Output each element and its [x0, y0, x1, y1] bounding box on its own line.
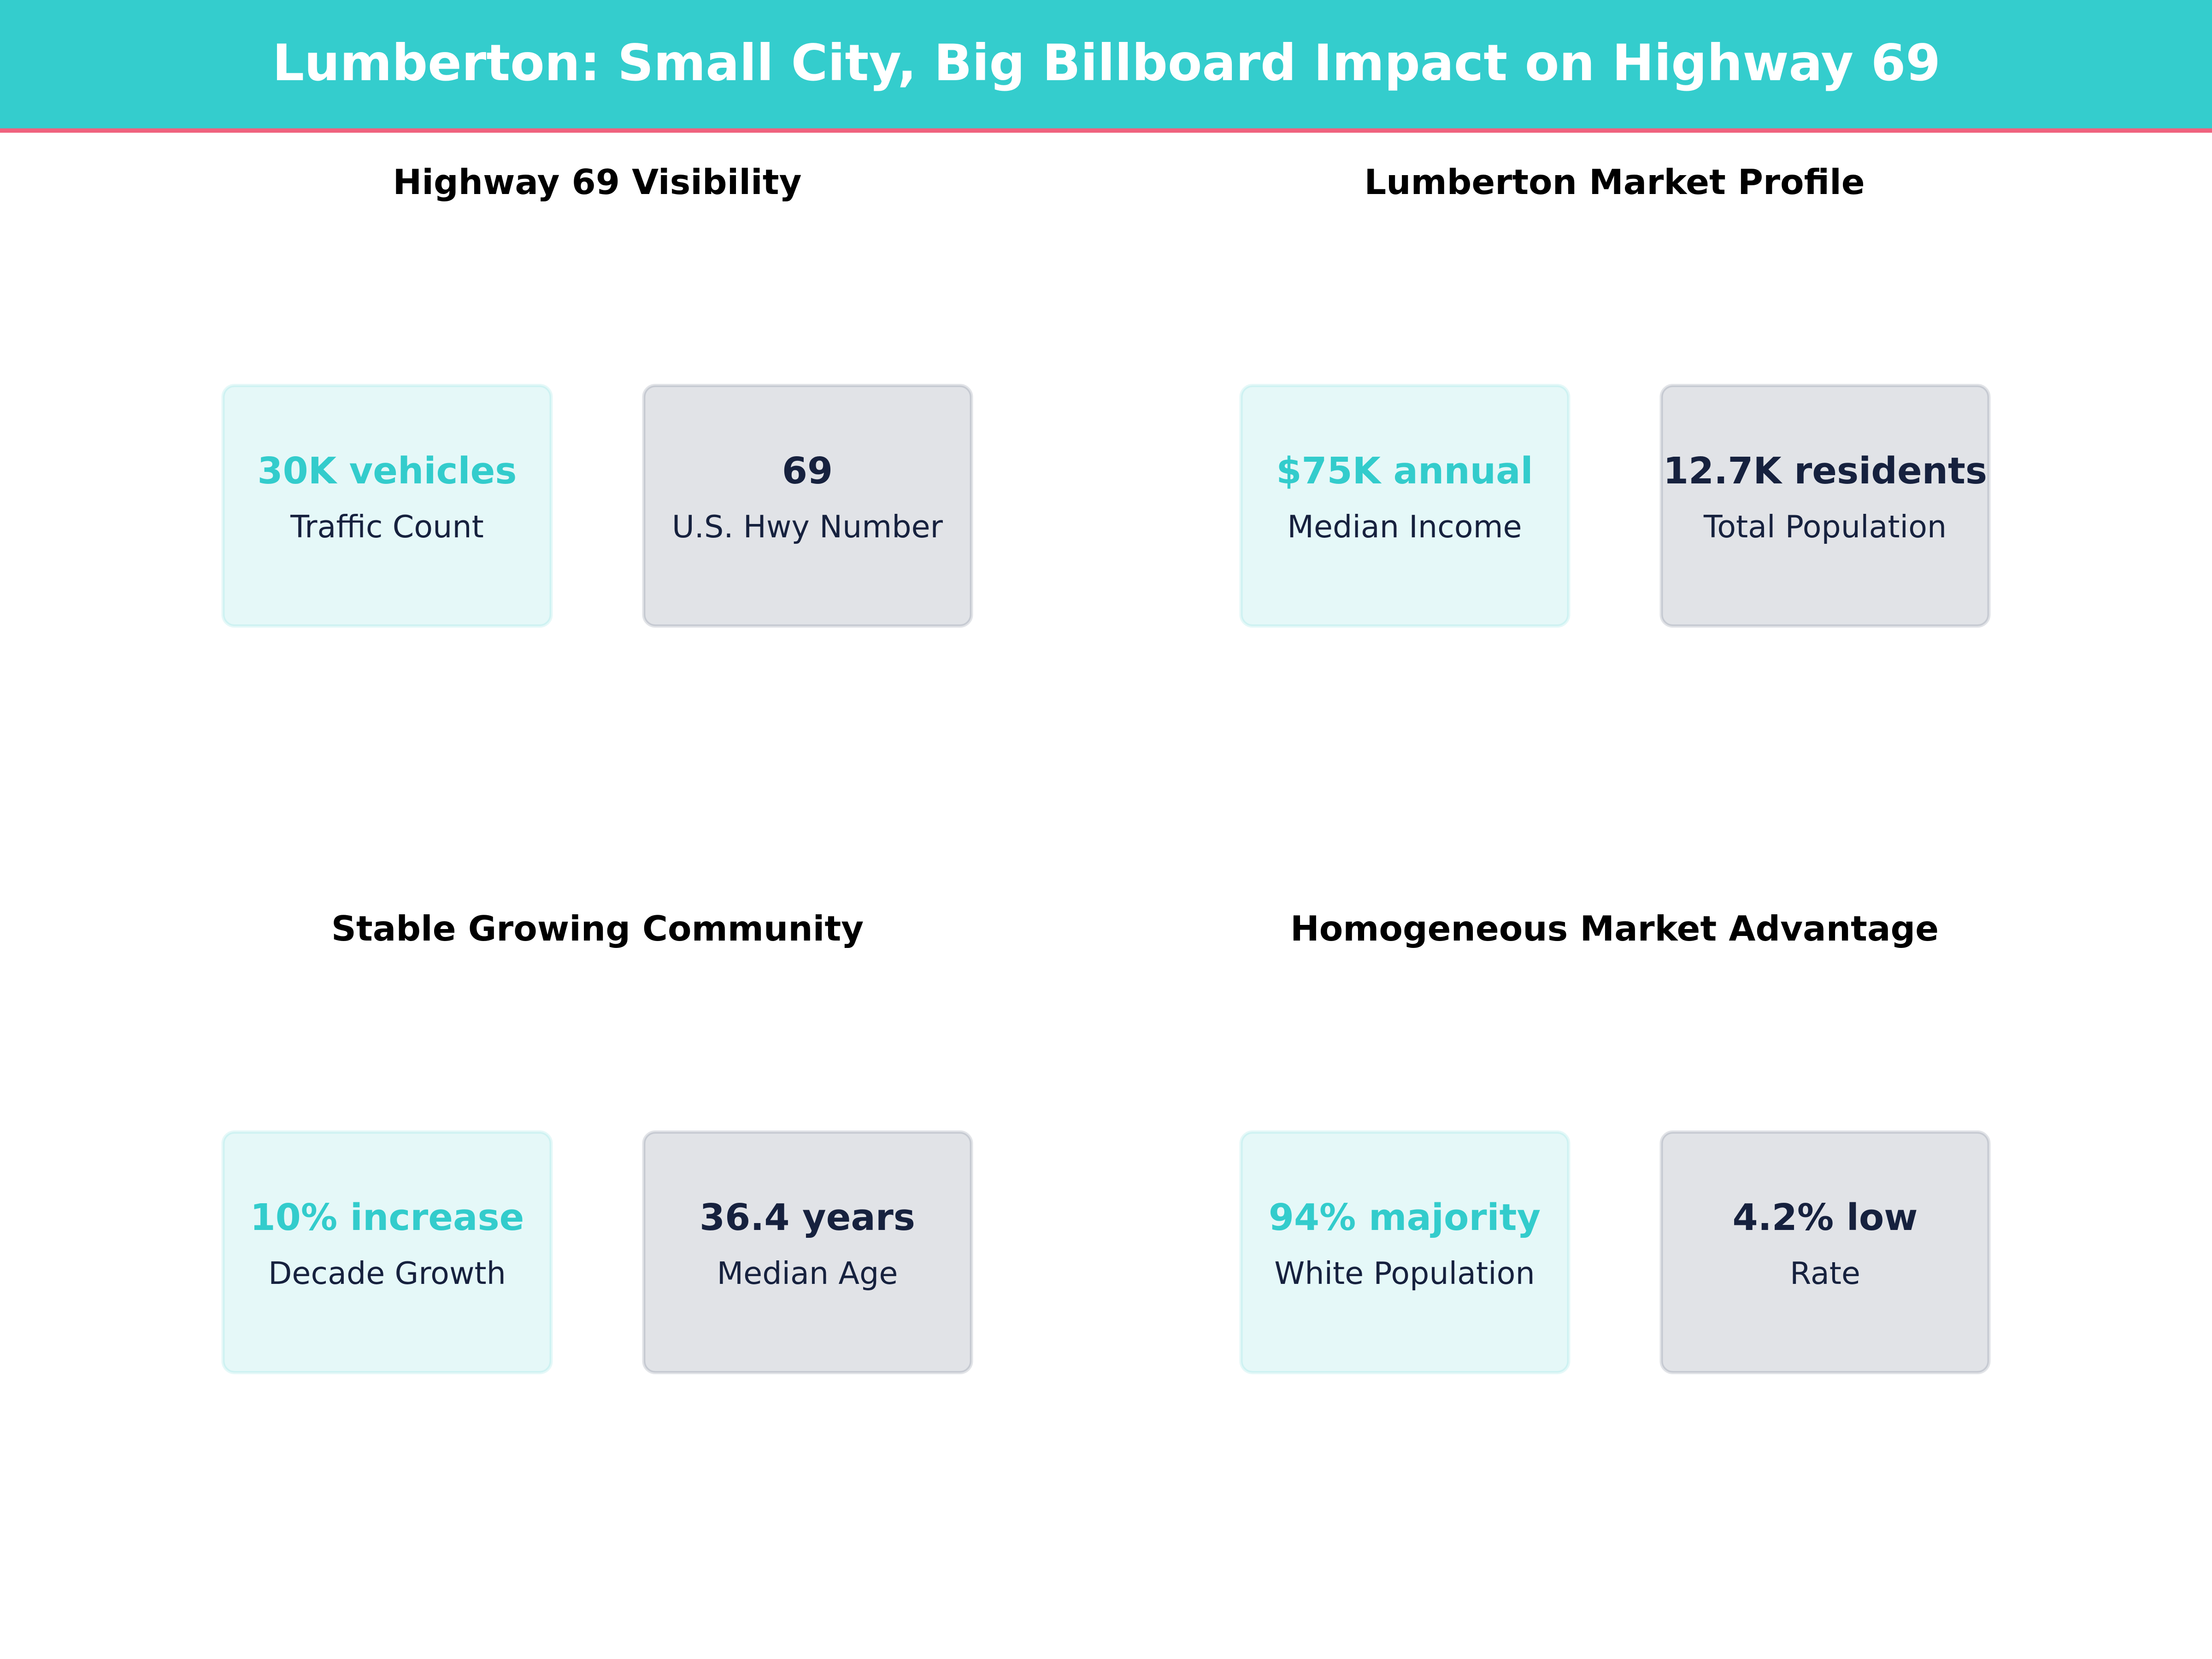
stat card: highway number: [644, 385, 971, 626]
stat card: total population: 12.7K residents: [1663, 449, 1987, 492]
stat card: median income: $75K annual: [1276, 449, 1533, 492]
stat card: median age: [644, 1132, 971, 1372]
stat card: decade growth: Decade Growth: [268, 1255, 506, 1291]
stat card: traffic count: [223, 385, 551, 626]
panel: Lumberton Market Profile: [1241, 162, 1989, 626]
stat card: decade growth: 10% increase: [250, 1196, 524, 1239]
stat card: median age: Median Age: [717, 1255, 898, 1291]
heading: Homogeneous Market Advantage: Homogeneous Market Advantage: [1290, 908, 1939, 949]
heading: Lumberton Market Profile: Lumberton Market Profile: [1364, 162, 1865, 202]
title: Lumberton: Small City, Big Billboard Impact on Highway 69: [272, 34, 1941, 92]
stat card: median income: Median Income: [1287, 509, 1522, 545]
stat card: median age: 36.4 years: [700, 1196, 915, 1239]
stat card: traffic count: Traffic Count: [290, 509, 484, 545]
stat card: white population: 94% majority: [1269, 1196, 1541, 1239]
stat card: white population: [1241, 1132, 1569, 1372]
stat card: total population: Total Population: [1703, 509, 1947, 545]
stat card: highway number: U.S. Hwy Number: [672, 509, 943, 545]
stat card: total population: [1661, 385, 1989, 626]
title banner: [0, 0, 2212, 133]
stat card: rate: [1661, 1132, 1989, 1372]
stat card: rate: 4.2% low: [1733, 1196, 1918, 1239]
heading: Highway 69 Visibility: Highway 69 Visibility: [393, 162, 801, 202]
panel: Homogeneous Market Advantage: [1241, 908, 1989, 1372]
heading: Stable Growing Community: Stable Growing Community: [331, 908, 864, 949]
stat card: traffic count: 30K vehicles: [258, 449, 517, 492]
panel: Stable Growing Community: [223, 908, 971, 1372]
stat card: white population: White Population: [1274, 1255, 1535, 1291]
stat card: highway number: 69: [782, 449, 833, 492]
panel: Highway 69 Visibility: [223, 162, 971, 626]
stat card: decade growth: [223, 1132, 551, 1372]
stat card: median income: [1241, 385, 1569, 626]
stat card: rate: Rate: [1790, 1255, 1860, 1291]
